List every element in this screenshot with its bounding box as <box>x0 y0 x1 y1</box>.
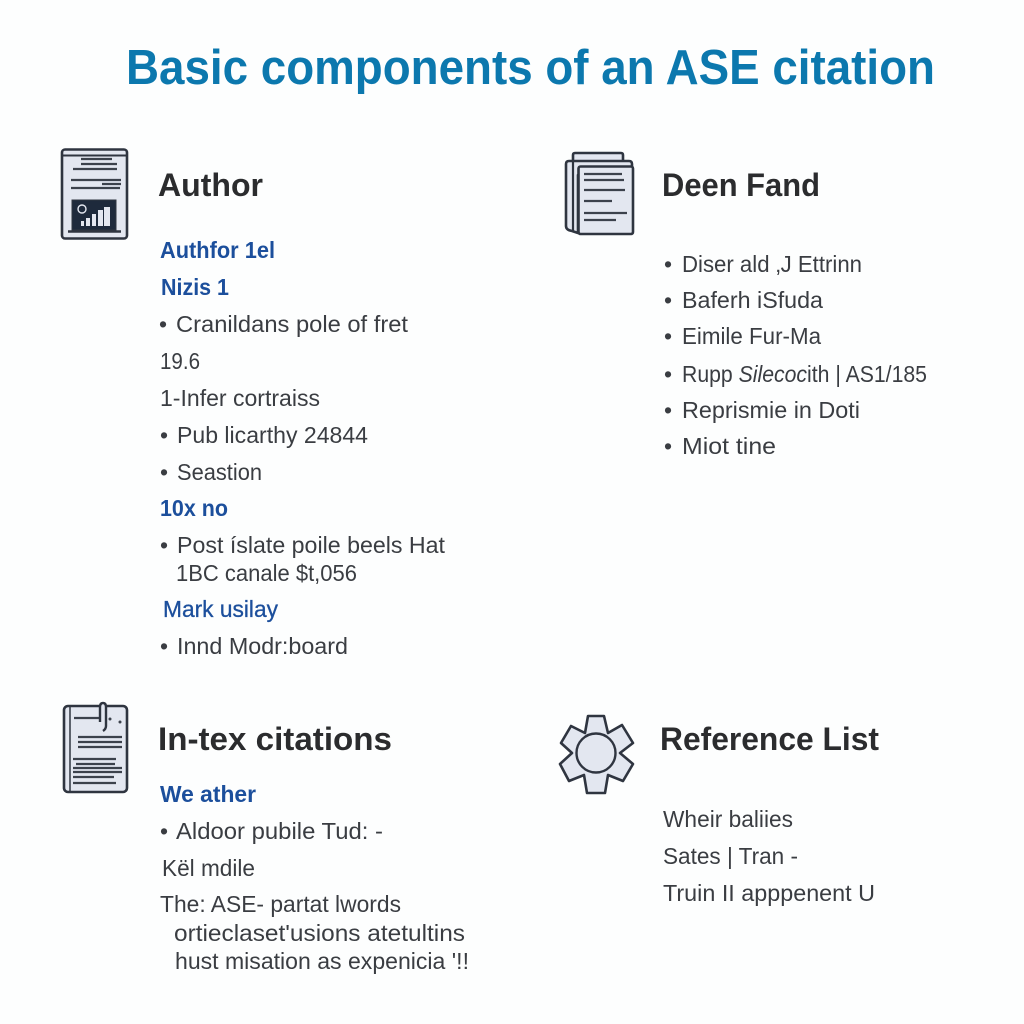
text block: citation details: The: ASE- partat lwords <box>160 891 401 917</box>
icon: clipped note <box>64 703 127 792</box>
text block: author details: • <box>159 311 167 337</box>
list: deen fand items <box>664 251 927 459</box>
list: deen fand items: • <box>664 397 672 423</box>
text block: reference list details: Sates | Tran - <box>663 843 798 869</box>
heading: deen fand: Deen Fand <box>662 167 820 203</box>
list: deen fand items: • <box>664 361 672 387</box>
icon: document with chart <box>62 150 127 238</box>
text block: author details <box>159 311 409 485</box>
text block: citation details: hust misation as expenicia '!! <box>175 948 469 974</box>
panel: deen fand <box>566 153 927 459</box>
text block: author details: 19.6 <box>160 348 200 374</box>
text block: post details: Post íslate poile beels Hat <box>177 532 446 558</box>
list: deen fand items: Rupp Silecocith | AS1/185 <box>682 361 927 387</box>
text block: author details: Cranildans pole of fret <box>176 311 409 337</box>
subheading: mark usilay: Mark usilay <box>163 596 278 622</box>
subheading: 10x no: 10x no <box>160 495 228 521</box>
text item: modr board: Innd Modr:board <box>177 633 348 659</box>
subheading: we ather: We ather <box>160 781 256 807</box>
text block: author details: • <box>160 422 168 448</box>
heading: in-tex citations: In-tex citations <box>158 721 392 757</box>
icon: stacked documents <box>566 153 633 234</box>
title: Basic components of an ASE citation <box>126 41 935 95</box>
subheading: authfor: Authfor 1el <box>160 237 275 263</box>
list: deen fand items: Eimile Fur-Ma <box>682 323 821 349</box>
heading: reference list: Reference List <box>660 721 879 757</box>
list: deen fand items: Miot tine <box>682 433 776 459</box>
text block: citation details: • <box>160 818 168 844</box>
heading: author: Author <box>158 167 263 203</box>
text block: citation details <box>160 818 469 974</box>
text block: author details: Seastion <box>177 459 262 485</box>
list: deen fand items: • <box>664 251 672 277</box>
text block: author details: 1-Infer cortraiss <box>160 385 320 411</box>
list: deen fand items: • <box>664 433 672 459</box>
text block: citation details: Kël mdile <box>162 855 255 881</box>
text block: reference list details <box>663 806 875 906</box>
list: deen fand items: Reprismie in Doti <box>682 397 860 423</box>
text block: reference list details: Truin II apppenent U <box>663 880 875 906</box>
text block: author details: Pub licarthy 24844 <box>177 422 368 448</box>
panel: reference list <box>560 716 879 906</box>
text block: citation details: ortieclaset'usions atetultins <box>174 920 465 946</box>
subheading: nizis: Nizis 1 <box>161 274 229 300</box>
panel: author <box>62 150 446 659</box>
icon: gear <box>560 716 633 793</box>
text block: post details: 1BC canale $t,056 <box>176 560 357 586</box>
text item: modr board: • <box>160 633 168 659</box>
text block: post details: • <box>160 532 168 558</box>
text block: citation details: Aldoor pubile Tud: - <box>176 818 383 844</box>
text block: author details: • <box>160 459 168 485</box>
text block: reference list details: Wheir baliies <box>663 806 793 832</box>
text block: post details <box>160 532 446 586</box>
list: deen fand items: • <box>664 323 672 349</box>
list: deen fand items: • <box>664 287 672 313</box>
list: deen fand items: Baferh iSfuda <box>682 287 823 313</box>
list: deen fand items: Diser ald ‚J Ettrinn <box>682 251 862 277</box>
panel: in-text citations <box>64 703 469 974</box>
